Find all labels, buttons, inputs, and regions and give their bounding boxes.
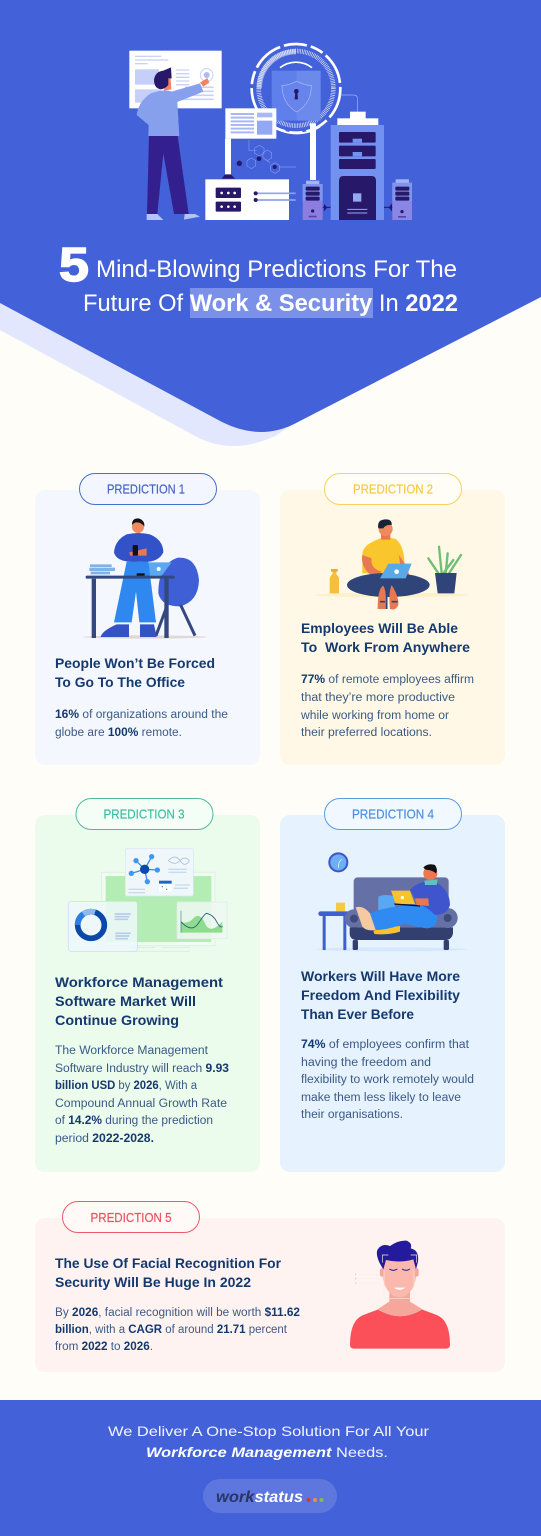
- body text: billion USD by 2026, With a: [55, 1080, 198, 1092]
- footer band: [0, 1400, 541, 1536]
- title: [59, 239, 458, 318]
- pill: prediction 2: [324, 474, 462, 504]
- footer text: Workforce Management Needs.: [146, 1444, 388, 1460]
- title line 2: Future Of Work & Security In 2022: [83, 290, 458, 317]
- pill: prediction 2: PREDICTION 2: [353, 482, 433, 496]
- pill: prediction 5: [62, 1202, 200, 1232]
- heading: [55, 974, 223, 1028]
- heading: Freedom And Flexibility: [301, 987, 460, 1003]
- heading: To Go To The Office: [55, 674, 185, 690]
- body text: make them less likely to leave: [301, 1092, 461, 1104]
- body text: globe are 100% remote.: [55, 727, 182, 739]
- header chevron background: [0, 0, 541, 432]
- heading: Continue Growing: [55, 1012, 179, 1028]
- body text: Software Industry will reach 9.93: [55, 1063, 229, 1075]
- body text: from 2022 to 2026.: [55, 1341, 153, 1353]
- panel: prediction 5: [35, 1202, 505, 1372]
- donut card: [68, 901, 137, 951]
- body text: By 2026, facial recognition will be worth $11.62: [55, 1307, 300, 1319]
- small server right: [384, 179, 412, 220]
- body text: flexibility to work remotely would: [301, 1074, 474, 1086]
- heading: People Won’t Be Forced: [55, 655, 215, 671]
- title highlight: [190, 288, 373, 318]
- heading: The Use Of Facial Recognition For: [55, 1255, 282, 1271]
- header chevron shadow: [0, 300, 330, 446]
- illustration: man on sofa: [317, 853, 467, 951]
- heading: Software Market Will: [55, 993, 196, 1009]
- body text: Compound Annual Growth Rate: [55, 1098, 227, 1110]
- panel: prediction 2: [280, 474, 505, 765]
- pill: prediction 4: PREDICTION 4: [352, 808, 434, 822]
- illustration: dashboard: [68, 849, 227, 951]
- body text: 77% of remote employees affirm: [301, 674, 474, 686]
- panel: prediction 3: [35, 798, 260, 1172]
- body text: their preferred locations.: [301, 727, 432, 739]
- document panel: [222, 108, 276, 179]
- body text: [55, 709, 228, 739]
- body text: [300, 674, 474, 739]
- pill: prediction 1: [80, 474, 216, 504]
- small server left: [303, 181, 331, 220]
- body text: 16% of organizations around the: [55, 709, 228, 721]
- pill: prediction 4: [324, 798, 462, 830]
- heading: Workforce Management: [55, 974, 223, 990]
- body text: of 14.2% during the prediction: [55, 1115, 213, 1127]
- heading: [55, 1255, 282, 1290]
- illustration: man with laptop on floor: [315, 519, 468, 609]
- shield security ring: [252, 44, 340, 133]
- chart card: [177, 902, 227, 939]
- illustration: facial recognition: [350, 1241, 450, 1349]
- body text: their organisations.: [301, 1109, 403, 1121]
- network card: [125, 849, 193, 896]
- shield door with keyhole: [272, 71, 321, 121]
- pill: prediction 3: PREDICTION 3: [104, 808, 185, 822]
- heading: Security Will Be Huge In 2022: [55, 1274, 251, 1290]
- illustration: man at desk: [83, 518, 207, 639]
- heading: Than Ever Before: [301, 1006, 414, 1022]
- footer text: [108, 1423, 429, 1460]
- monitor: [102, 872, 215, 951]
- body text: The Workforce Management: [55, 1045, 209, 1057]
- logo pill: [203, 1479, 337, 1513]
- body text: while working from home or: [300, 710, 449, 722]
- hero illustration: [129, 44, 412, 220]
- body text: [55, 1045, 229, 1145]
- pill: prediction 1: PREDICTION 1: [107, 482, 185, 496]
- hexagon network: [237, 140, 296, 173]
- title line 1: Mind-Blowing Predictions For The: [96, 256, 457, 283]
- body text: [55, 1307, 300, 1353]
- heading: [301, 620, 470, 655]
- title number: 5: [59, 239, 89, 292]
- pill: prediction 3: [76, 798, 213, 830]
- heading: Workers Will Have More: [301, 968, 460, 984]
- body text: [301, 1039, 474, 1121]
- heading: Employees Will Be Able: [301, 620, 458, 636]
- panel: prediction 4: [280, 798, 505, 1172]
- heading: [55, 655, 215, 690]
- footer text: We Deliver A One-Stop Solution For All Your: [108, 1423, 429, 1439]
- heading: [301, 968, 460, 1022]
- body text: 74% of employees confirm that: [301, 1039, 470, 1051]
- screen panel: [129, 51, 222, 108]
- body text: that they’re more productive: [301, 692, 455, 704]
- main server tower: [331, 95, 384, 220]
- man pointing: [137, 67, 209, 220]
- panel: prediction 1: [35, 474, 260, 765]
- heading: To Work From Anywhere: [301, 639, 470, 655]
- server box: [205, 179, 296, 220]
- body text: billion, with a CAGR of around 21.71 percent: [55, 1324, 288, 1336]
- connector post: [310, 123, 316, 180]
- logo pill: workstatus: [216, 1489, 303, 1506]
- body text: having the freedom and: [301, 1057, 431, 1069]
- pill: prediction 5: PREDICTION 5: [90, 1211, 172, 1225]
- body text: period 2022-2028.: [55, 1133, 154, 1145]
